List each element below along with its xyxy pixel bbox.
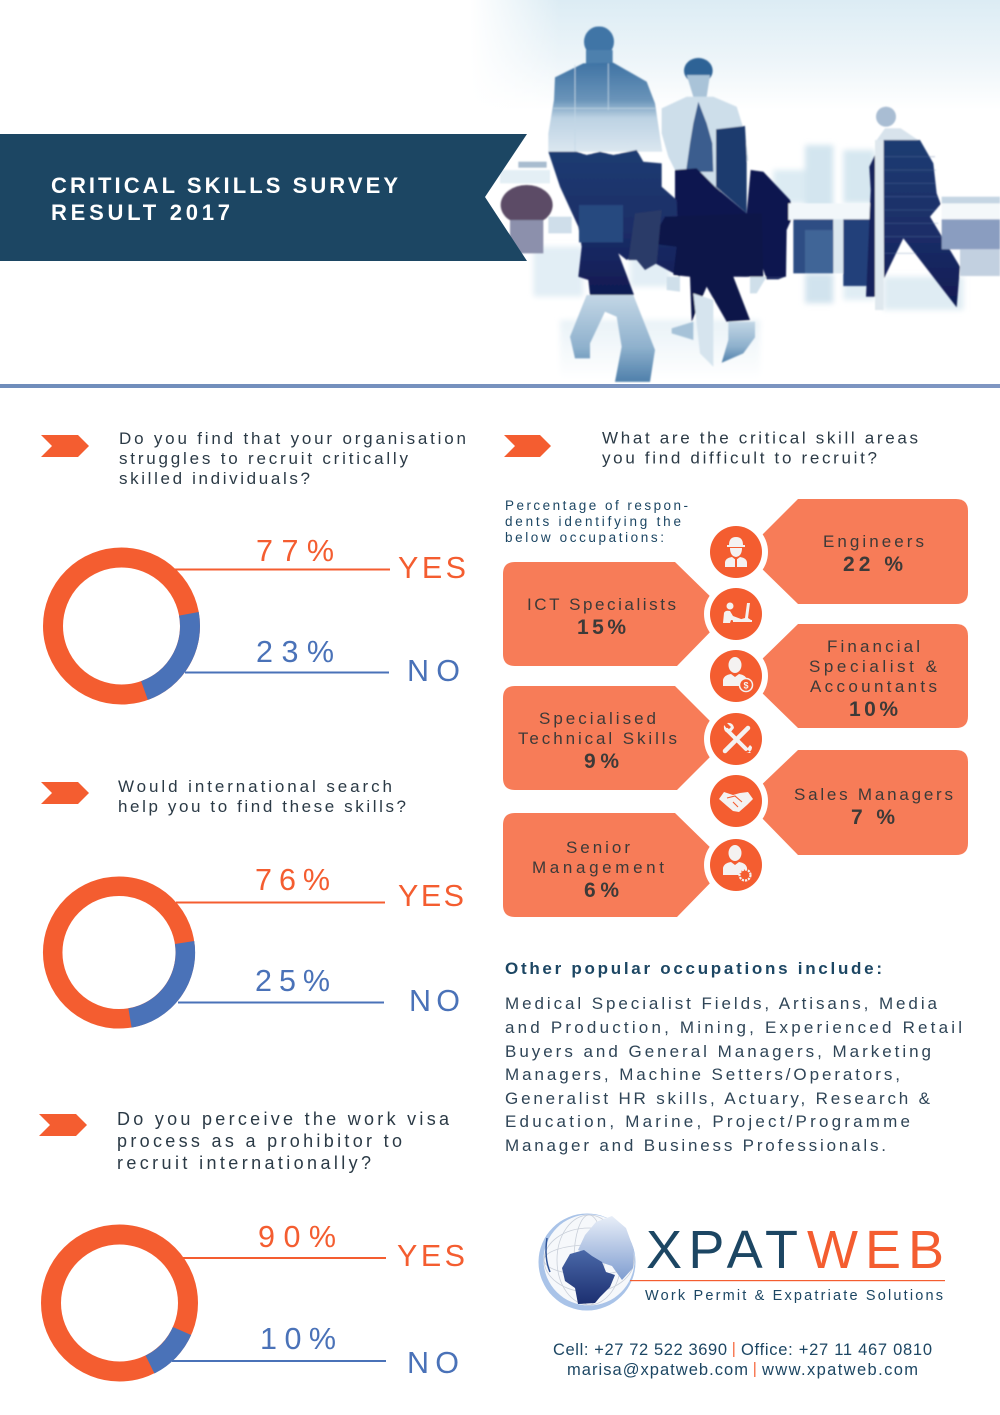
no callout bbox=[185, 635, 460, 688]
contact details bbox=[553, 1341, 932, 1379]
person one bbox=[584, 26, 614, 57]
occupation: financial specialist: 10% bbox=[849, 698, 898, 721]
yes callout: 90% bbox=[258, 1220, 336, 1254]
occupation: engineers: Engineers bbox=[823, 532, 924, 551]
panel: question 3 bbox=[39, 1109, 465, 1380]
donut chart 77/23 bbox=[53, 558, 190, 694]
center dark mass and legs bbox=[650, 213, 763, 322]
subheading: Other popular occupations include: bbox=[505, 959, 882, 978]
intro note bbox=[505, 498, 688, 545]
no callout bbox=[178, 964, 460, 1018]
panel: critical skill areas bbox=[503, 428, 968, 917]
contact details: www.xpatweb.com bbox=[761, 1361, 918, 1379]
question text: Do you perceive the work visa bbox=[117, 1109, 450, 1129]
occupation: ICT specialists: 15% bbox=[577, 616, 626, 639]
question text: you find difficult to recruit? bbox=[602, 448, 877, 468]
occupation: ICT specialists: ICT Specialists bbox=[527, 595, 676, 614]
contact details: Office: +27 11 467 0810 bbox=[741, 1341, 932, 1359]
occupations paragraph: Generalist HR skills, Actuary, Research & bbox=[505, 1089, 931, 1108]
occupation: specialised technical skills: Technical Skills bbox=[518, 729, 677, 748]
occupation: engineers: 22 % bbox=[843, 553, 903, 576]
wordmark: WEB bbox=[807, 1220, 944, 1280]
panel: question 2 bbox=[41, 777, 464, 1019]
donut chart 76/25 bbox=[53, 886, 185, 1019]
contact details: Cell: +27 72 522 3690 bbox=[553, 1341, 727, 1359]
icon: tools bbox=[704, 707, 768, 771]
icon: globe bbox=[538, 1214, 636, 1310]
no callout: NO bbox=[407, 654, 460, 688]
icon: ict worker at computer bbox=[704, 582, 768, 646]
question text bbox=[117, 1109, 450, 1173]
wordmark: XPAT bbox=[646, 1220, 798, 1280]
question text: struggles to recruit critically bbox=[119, 449, 408, 468]
title: CRITICAL SKILLS SURVEY bbox=[51, 173, 398, 198]
arrow marker bbox=[504, 435, 551, 457]
header rule bbox=[0, 384, 1000, 388]
logo: Xpatweb bbox=[538, 1214, 945, 1310]
donut chart 90/10 bbox=[51, 1234, 188, 1372]
occupation: engineers bbox=[755, 499, 968, 604]
title: RESULT 2017 bbox=[51, 200, 230, 225]
occupation: senior management: Management bbox=[532, 858, 664, 877]
question text: help you to find these skills? bbox=[118, 797, 406, 816]
tagline: Work Permit & Expatriate Solutions bbox=[645, 1288, 943, 1304]
occupation: specialised technical skills: Specialised bbox=[539, 709, 656, 728]
intro note: dents identifying the bbox=[505, 514, 681, 529]
person three bbox=[876, 107, 896, 127]
no callout bbox=[172, 1322, 459, 1380]
occupation: sales managers bbox=[755, 750, 968, 855]
occupation: specialised technical skills bbox=[503, 686, 718, 790]
yes callout bbox=[176, 863, 464, 913]
occupations paragraph: and Production, Mining, Experienced Retail bbox=[505, 1018, 962, 1037]
yes callout bbox=[175, 534, 466, 585]
occupation: ICT specialists bbox=[503, 562, 718, 666]
question text bbox=[119, 429, 466, 488]
no callout: NO bbox=[409, 984, 460, 1018]
occupation: senior management: 6% bbox=[584, 879, 619, 902]
panel: question 1 bbox=[41, 429, 466, 694]
title banner bbox=[0, 134, 527, 261]
yes callout: YES bbox=[398, 551, 466, 585]
panel: other popular occupations bbox=[505, 959, 962, 1155]
question text: What are the critical skill areas bbox=[602, 428, 918, 448]
no callout: 10% bbox=[260, 1322, 336, 1356]
arrow marker bbox=[39, 1114, 87, 1136]
question text: Do you find that your organisation bbox=[119, 429, 466, 448]
no callout: 25% bbox=[255, 964, 330, 998]
yes callout: YES bbox=[398, 879, 464, 913]
yes callout: 77% bbox=[256, 534, 334, 568]
occupation: specialised technical skills: 9% bbox=[584, 750, 619, 773]
occupation: sales managers: 7 % bbox=[851, 806, 895, 829]
title bbox=[51, 173, 398, 225]
occupation: financial specialist: Accountants bbox=[810, 677, 937, 696]
arrow marker bbox=[41, 782, 89, 804]
contact details: marisa@xpatweb.com bbox=[567, 1361, 748, 1379]
icon: accountant: $ bbox=[743, 680, 749, 690]
icon: accountant bbox=[704, 644, 768, 708]
arrow marker bbox=[41, 435, 89, 457]
yes callout: 76% bbox=[255, 863, 330, 897]
person two shirt (behind) bbox=[662, 97, 748, 200]
icon: engineer bbox=[704, 520, 768, 584]
occupations paragraph: Manager and Business Professionals. bbox=[505, 1136, 886, 1155]
railing and reflections bbox=[788, 203, 877, 220]
question text: recruit internationally? bbox=[117, 1153, 371, 1173]
yes callout: YES bbox=[397, 1239, 465, 1273]
occupation: senior management: Senior bbox=[566, 838, 630, 857]
icon: manager with gear bbox=[704, 833, 768, 897]
occupation: financial specialist: Specialist & bbox=[809, 657, 938, 676]
question text bbox=[118, 777, 406, 816]
intro note: below occupations: bbox=[505, 530, 664, 545]
icon: handshake bbox=[704, 769, 768, 833]
occupations paragraph: Managers, Machine Setters/Operators, bbox=[505, 1065, 900, 1084]
occupations paragraph bbox=[505, 994, 962, 1155]
occupation: financial specialist: Financial bbox=[827, 637, 920, 656]
occupation: financial specialist bbox=[755, 624, 968, 728]
wordmark bbox=[646, 1220, 944, 1280]
occupation: sales managers: Sales Managers bbox=[794, 785, 953, 804]
no callout: 23% bbox=[256, 635, 334, 669]
question text: Would international search bbox=[118, 777, 392, 796]
question text: skilled individuals? bbox=[119, 469, 310, 488]
left blurred figure bbox=[518, 162, 547, 168]
intro note: Percentage of respon- bbox=[505, 498, 688, 513]
question text bbox=[602, 428, 918, 468]
occupations paragraph: Education, Marine, Project/Programme bbox=[505, 1112, 910, 1131]
occupations paragraph: Medical Specialist Fields, Artisans, Media bbox=[505, 994, 938, 1013]
yes callout bbox=[183, 1220, 465, 1273]
header photo: business people walking bbox=[440, 0, 1000, 383]
no callout: NO bbox=[407, 1346, 459, 1380]
occupations paragraph: Buyers and General Managers, Marketing bbox=[505, 1042, 931, 1061]
occupation: senior management bbox=[503, 813, 718, 917]
question text: process as a prohibitor to bbox=[117, 1131, 402, 1151]
